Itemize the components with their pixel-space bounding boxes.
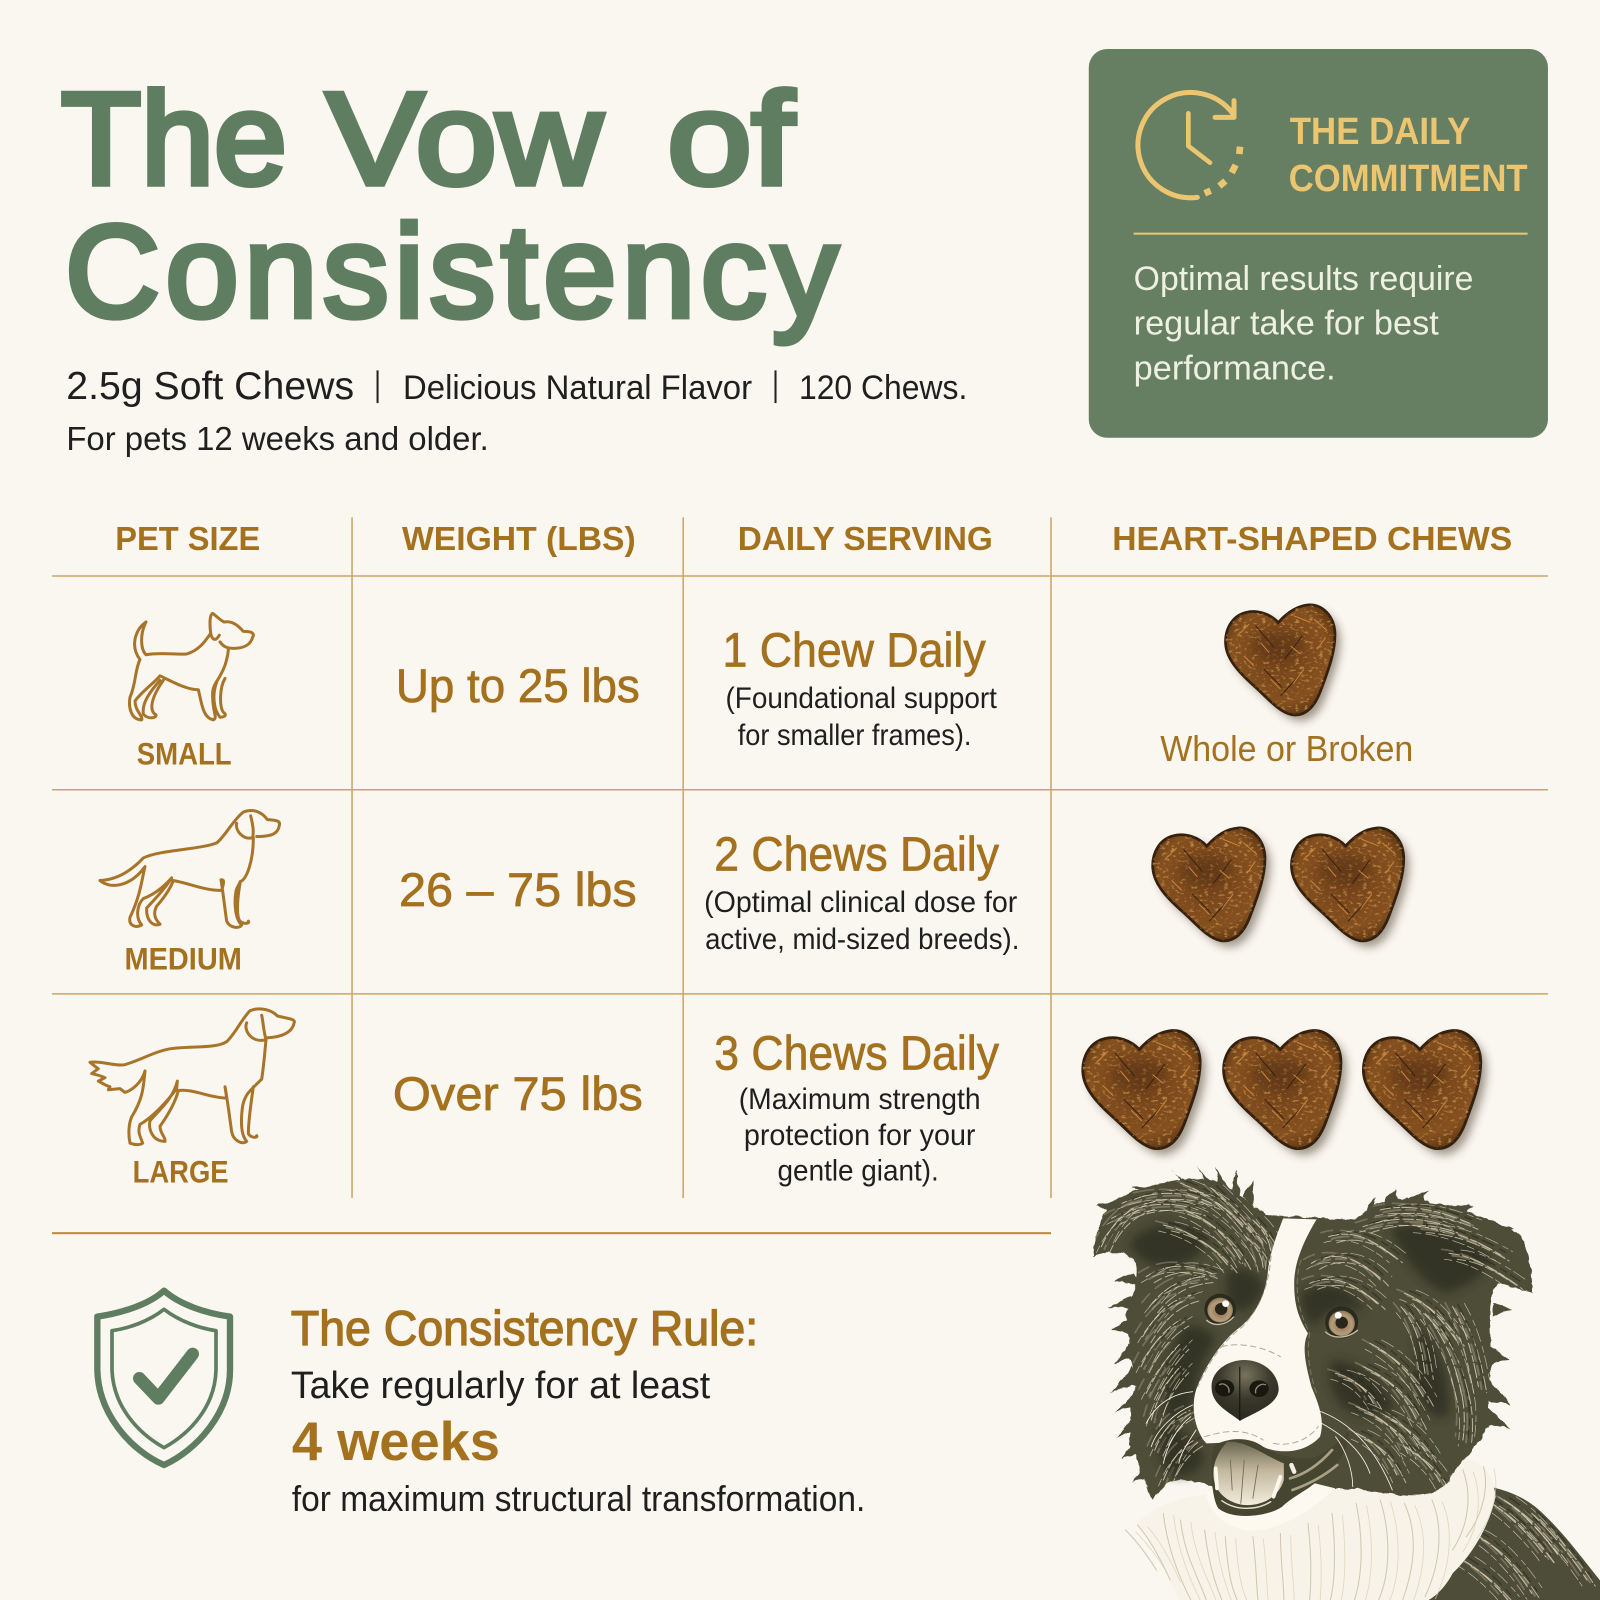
panel body text: Optimal results require (1134, 260, 1473, 298)
serving: small: for smaller frames). (738, 719, 971, 752)
fur spikes on outline (1096, 1165, 1515, 1483)
shoulder (1418, 1483, 1600, 1600)
nose (1212, 1360, 1279, 1421)
rule text: for maximum structural transformation. (292, 1479, 865, 1519)
blaze fur edge (1198, 1247, 1318, 1444)
label: small: SMALL (137, 735, 232, 771)
panel heading: THE DAILY (1290, 110, 1470, 152)
chin (1206, 1480, 1336, 1531)
title: Vow (327, 66, 603, 212)
serving: large: protection for your (744, 1119, 976, 1152)
rule text: The Consistency Rule: (291, 1302, 758, 1356)
table header row (115, 521, 1512, 558)
note: whole or broken: Whole or Broken (1160, 729, 1413, 769)
white blaze and muzzle (1194, 1218, 1322, 1451)
eyes (1204, 1294, 1358, 1338)
rule text: 4 weeks (292, 1410, 500, 1472)
serving: small (722, 624, 997, 752)
table header row: HEART-SHAPED CHEWS (1112, 521, 1512, 558)
icon: large dog (90, 1009, 294, 1145)
callout: the consistency rule (97, 1291, 865, 1519)
title: of (667, 66, 795, 212)
icon: one heart chew (1224, 603, 1340, 721)
subtitle (66, 365, 967, 458)
serving: large: (Maximum strength (739, 1083, 981, 1116)
icon: small dog (130, 613, 253, 720)
panel body text: performance. (1134, 350, 1336, 388)
serving: large: gentle giant). (778, 1155, 939, 1188)
tongue (1213, 1442, 1284, 1505)
chest fur strokes (1125, 1467, 1496, 1600)
table header row: PET SIZE (115, 521, 260, 558)
row: small dog (130, 603, 1413, 771)
serving: large: 3 Chews Daily (714, 1027, 999, 1080)
serving: large (714, 1027, 999, 1188)
title (61, 66, 838, 344)
icon: clock with arrow (1138, 92, 1240, 198)
subtitle: 120 Chews. (799, 369, 967, 407)
weight: small: Up to 25 lbs (396, 660, 640, 712)
panel: the daily commitment (1089, 49, 1548, 438)
icon: two heart chews (1151, 826, 1409, 947)
label: large: LARGE (133, 1154, 229, 1190)
subtitle: Delicious Natural Flavor (403, 369, 752, 407)
dosage table (52, 517, 1548, 1198)
chest ruff (1137, 1460, 1496, 1600)
panel body text (1134, 260, 1473, 388)
row: large dog (90, 1009, 1486, 1190)
serving: medium: active, mid-sized breeds). (705, 923, 1019, 956)
rule text (291, 1302, 865, 1519)
serving: medium: (Optimal clinical dose for (704, 886, 1017, 919)
serving: medium: 2 Chews Daily (714, 828, 999, 881)
head silhouette (1093, 1165, 1532, 1500)
title: The (61, 66, 287, 212)
subtitle: For pets 12 weeks and older. (66, 421, 489, 458)
table header row: DAILY SERVING (738, 521, 993, 558)
mouth details (1216, 1450, 1337, 1508)
icon: medium dog (100, 811, 280, 927)
label: medium: MEDIUM (124, 940, 242, 976)
weight: medium: 26 – 75 lbs (399, 864, 637, 916)
table header row: WEIGHT (LBS) (402, 521, 636, 558)
serving: medium (704, 828, 1019, 956)
weight: large: Over 75 lbs (393, 1068, 643, 1120)
serving: small: 1 Chew Daily (722, 624, 986, 677)
panel body text: regular take for best (1134, 305, 1439, 343)
panel heading: COMMITMENT (1289, 157, 1528, 199)
row: medium dog (100, 811, 1409, 976)
subtitle: 2.5g Soft Chews (66, 365, 354, 408)
title: Consistency (65, 198, 838, 344)
rule text: Take regularly for at least (291, 1364, 711, 1406)
illustration: border collie portrait (1093, 1165, 1600, 1600)
dark fur patches (1129, 1224, 1490, 1476)
mouth (1212, 1430, 1349, 1516)
whiskers (1146, 1392, 1392, 1490)
panel heading (1289, 110, 1528, 199)
icon: shield with check (97, 1291, 230, 1465)
icon: three heart chews (1081, 1028, 1486, 1155)
fur highlights (1094, 1179, 1599, 1600)
serving: small: (Foundational support (726, 682, 997, 715)
